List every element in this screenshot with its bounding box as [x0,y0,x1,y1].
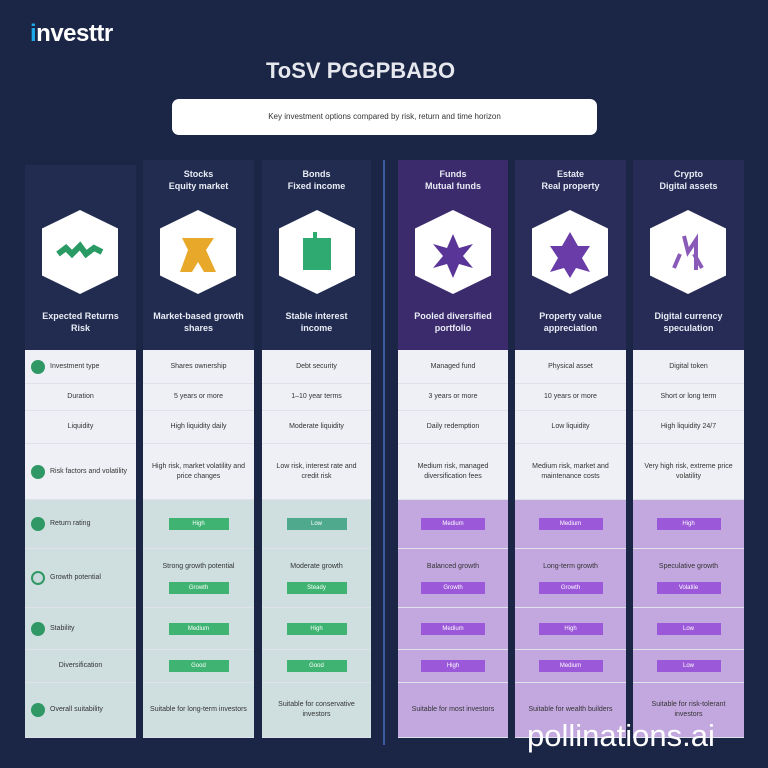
column 3: funds: Managed fund [431,362,475,370]
column 1: stocks: High liquidity daily [170,423,227,430]
column 5: crypto: Crypto [674,169,703,179]
column 3: funds: Growth [443,585,463,591]
column 4: real estate: High [564,626,577,632]
column 5: crypto: Digital assets [659,181,718,191]
column 0: labels: Risk [71,323,90,333]
column 0: labels: Liquidity [68,423,93,430]
subtitle bar [172,99,597,135]
column 3: funds [398,160,508,738]
column 0: labels: Stability [50,624,75,632]
column 4: real estate [515,160,626,738]
column 4: real estate: Medium [560,663,581,669]
column 4: real estate: Medium risk, market and maintenance costs [532,462,609,480]
column 3: funds: Funds [440,169,466,179]
divider [383,160,385,745]
column 2: bonds: Moderate growth [290,563,343,570]
column 3: funds: portfolio [435,323,471,333]
column 3: funds: 3 years or more [428,393,478,400]
column 1: stocks: Strong growth potential [162,563,234,570]
column 1: stocks: Shares ownership [170,362,227,370]
subtitle bar: Key investment options compared by risk, return and time horizon [268,112,501,121]
column 5: crypto: speculation [663,323,714,333]
column 5: crypto: Digital token [669,362,708,370]
column 5: crypto: High liquidity 24/7 [661,423,716,430]
column 1: stocks: shares [184,323,213,333]
column 1: stocks: Stocks [184,169,213,179]
column 1: stocks: Growth [189,585,208,591]
column 0: labels: Return rating [50,520,90,527]
column 2: bonds [262,160,371,738]
column 5: crypto: Low [683,663,694,669]
column 3: funds: High [447,663,459,669]
column 2: bonds: 1–10 year terms [291,393,342,400]
column 2: bonds: Low [311,521,322,527]
column 1: stocks: High risk, market volatility and price changes [152,462,245,480]
column 2: bonds: Moderate liquidity [289,423,344,430]
column 0: labels: Diversification [59,662,102,669]
column 1: stocks: Suitable for long-term investors [150,706,247,713]
column 2: bonds: Low risk, interest rate and credit risk [276,462,357,480]
column 4: real estate: Estate [557,169,584,179]
column 4: real estate: Physical asset [548,362,593,370]
watermark: pollinations.ai [527,718,715,753]
column 2: bonds: High [310,626,323,632]
column 3: funds: Pooled diversified [414,311,492,321]
column 2: bonds: Bonds [302,169,330,179]
column 4: real estate: Medium [560,521,581,527]
logo: investtr [30,20,113,47]
column 5: crypto [633,160,744,738]
column 3: funds: Medium [442,626,464,632]
column 0: labels: Investment type [50,362,99,370]
column 2: bonds: income [301,323,332,333]
column 5: crypto: Short or long term [660,393,717,400]
column 2: bonds: Steady [307,585,326,591]
column 2: bonds: Stable interest [285,311,348,321]
column 1: stocks: 5 years or more [174,393,223,400]
column 1: stocks: Good [191,663,206,669]
column 4: real estate: Long-term growth [543,563,598,570]
column 5: crypto: High [682,521,695,527]
column 3: funds: Suitable for most investors [412,706,494,713]
column 5: crypto: Digital currency [654,311,723,321]
column 1: stocks: High [192,521,205,527]
column 5: crypto: Speculative growth [659,563,718,570]
column 3: funds: Balanced growth [427,563,479,570]
column 5: crypto: Volatile [679,585,698,591]
column 4: real estate: Low liquidity [551,423,590,430]
column 1: stocks: Market-based growth [153,311,244,321]
column 0: labels: Growth potential [50,574,101,581]
column 4: real estate: Growth [561,585,580,591]
column 0: labels: Risk factors and volatility [50,468,127,474]
column 2: bonds: Debt security [296,362,337,370]
column 4: real estate: Real property [541,181,600,191]
column 1: stocks [143,160,254,738]
column 2: bonds: Suitable for conservative investors [278,701,355,718]
column 0: labels [25,165,136,738]
column 3: funds: Medium [442,521,464,527]
title: ToSV PGGPBABO [266,58,455,83]
column 0: labels: Overall suitability [50,706,103,713]
column 3: funds: Mutual funds [425,181,481,191]
column 0: labels: Duration [67,393,94,400]
column 2: bonds: Fixed income [288,181,345,191]
column 3: funds: Daily redemption [427,423,479,430]
column 1: stocks: Medium [188,626,209,632]
column 4: real estate: 10 years or more [544,393,597,400]
column 5: crypto: Very high risk, extreme price volatility [644,462,733,480]
column 4: real estate: Suitable for wealth builders [528,706,613,713]
column 5: crypto: Low [683,626,694,632]
column 4: real estate: Property value [539,311,602,321]
column 4: real estate: appreciation [544,323,597,333]
column 0: labels: Expected Returns [42,311,119,321]
column 3: funds: Medium risk, managed diversification fees [418,462,488,480]
column 1: stocks: Equity market [169,181,228,191]
column 2: bonds: Good [309,663,324,669]
column 5: crypto: Suitable for risk-tolerant investors [652,701,725,718]
